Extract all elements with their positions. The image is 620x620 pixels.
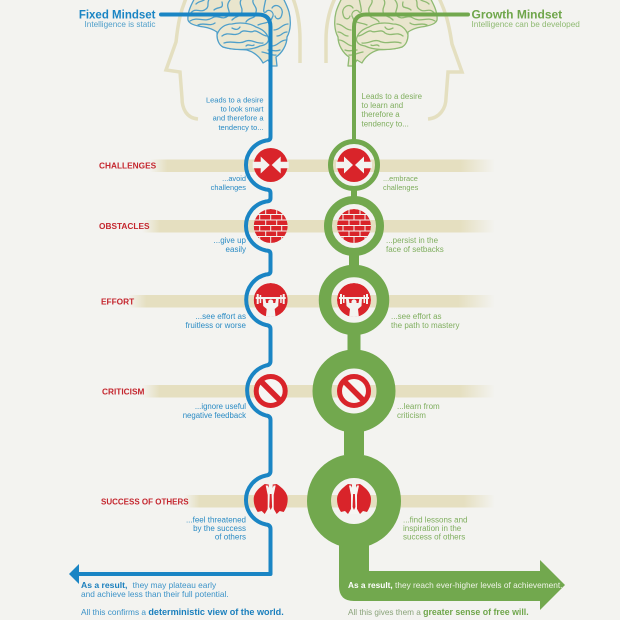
text: effort mastery: the path to mastery — [391, 321, 459, 330]
icon: effort, fixed — [254, 283, 288, 318]
text: find lessons: inspiration in the — [403, 524, 462, 533]
heading: growth mindset — [472, 8, 580, 29]
text: find lessons: success of others — [403, 532, 465, 542]
icon: success of others, fixed — [254, 484, 288, 514]
brain: fixed mindset — [188, 0, 290, 66]
icon: criticism, growth — [340, 376, 368, 406]
text: persist: ...persist in the — [386, 236, 439, 245]
text: embrace challenges: ...embrace — [383, 174, 418, 183]
text: growth intro: tendency to... — [362, 120, 409, 128]
head outline: growth mindset — [326, 0, 462, 119]
text: ignore feedback: ...ignore useful — [195, 402, 246, 411]
green rings — [319, 142, 389, 536]
icon: effort, growth — [337, 283, 371, 318]
blue path: fixed mindset line — [79, 14, 270, 574]
text: feel threatened: by the success — [193, 524, 246, 533]
text: give up easily: easily — [226, 245, 246, 254]
icon: challenges, growth — [336, 148, 372, 182]
green path: growth mindset line — [354, 14, 468, 140]
text: growth conclusion: All this gives them a greater sense of free will. — [348, 607, 529, 617]
text: learn from criticism: criticism — [397, 411, 426, 420]
text: feel threatened: ...feel threatened — [186, 516, 246, 524]
text: embrace challenges: challenges — [383, 183, 419, 192]
heading: fixed mindset: Fixed Mindset — [79, 10, 156, 22]
text: growth result: As a result, they reach ever-higher levels of achievement. — [348, 580, 562, 590]
text: feel threatened: of others — [215, 532, 246, 542]
text: find lessons: ...find lessons and — [403, 516, 467, 524]
text: give up easily: ...give up — [214, 236, 247, 245]
text: ignore feedback: negative feedback — [183, 411, 246, 420]
text: growth intro: therefore a — [362, 110, 400, 119]
text: learn from criticism: ...learn from — [397, 402, 440, 411]
text: effort fruitless: fruitless or worse — [186, 321, 247, 330]
text: fixed intro: to look smart — [221, 104, 264, 114]
text: fixed intro: and therefore a — [213, 114, 264, 122]
head outline: fixed mindset — [166, 0, 300, 119]
heading: fixed mindset: Intelligence is static — [84, 20, 156, 29]
green arrow — [339, 535, 565, 610]
text: fixed result: and achieve less than their full potential. — [81, 589, 229, 599]
text: effort mastery: ...see effort as — [391, 312, 442, 321]
text: fixed result: they may plateau early — [130, 580, 217, 590]
text: avoid challenges: ...avoid — [222, 174, 246, 183]
icon: challenges, fixed — [253, 148, 289, 182]
label: effort: EFFORT — [101, 296, 134, 306]
text: effort fruitless: ...see effort as — [195, 312, 246, 321]
icon: success of others, growth — [337, 484, 371, 514]
green stems between rings — [344, 188, 364, 455]
label: challenges: CHALLENGES — [99, 160, 157, 170]
heading: growth mindset: Intelligence can be developed — [472, 20, 580, 29]
text: growth intro: to learn and — [362, 101, 403, 110]
label: obstacles: OBSTACLES — [99, 221, 150, 231]
icon: criticism, fixed — [256, 376, 285, 406]
text: fixed intro: Leads to a desire — [206, 96, 264, 104]
text: fixed result: As a result, — [81, 580, 127, 590]
blue arrowhead — [69, 564, 79, 584]
heading: growth mindset: Growth Mindset — [472, 8, 562, 22]
text: growth intro: Leads to a desire — [362, 92, 423, 101]
text: fixed conclusion: All this confirms a deterministic view of the world. — [81, 607, 284, 617]
icon: obstacles, fixed — [253, 209, 289, 243]
text: fixed intro: tendency to... — [218, 123, 264, 132]
text: avoid challenges: challenges — [211, 183, 246, 192]
brain: growth mindset — [335, 0, 437, 66]
text: persist: face of setbacks — [386, 245, 444, 254]
heading: fixed mindset — [79, 10, 156, 29]
label: criticism: CRITICISM — [102, 386, 144, 396]
label: success of others: SUCCESS OF OTHERS — [101, 498, 189, 506]
row bands — [128, 160, 495, 508]
icon: obstacles, growth — [336, 209, 372, 243]
